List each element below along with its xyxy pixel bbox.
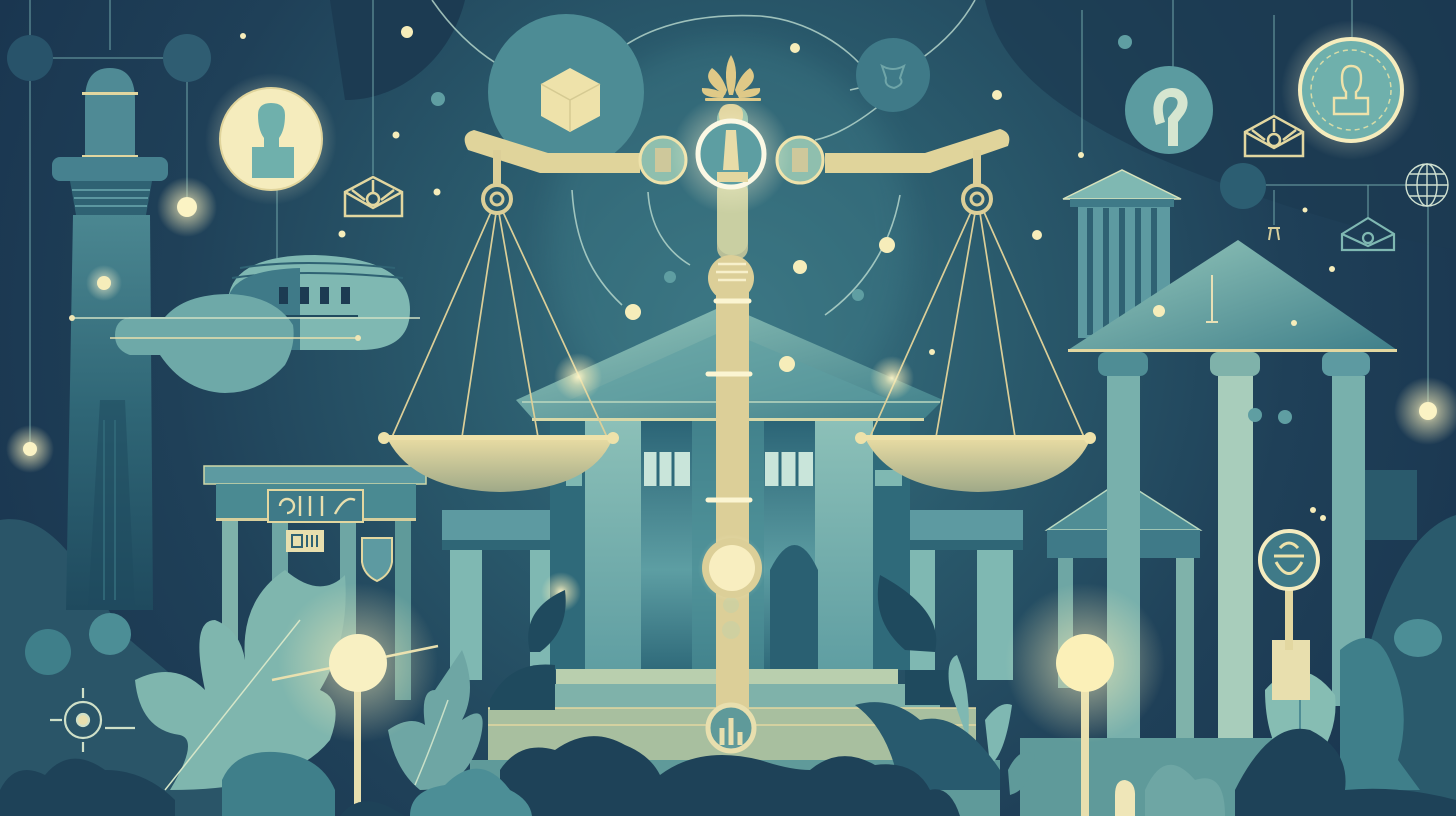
scale: left hanger and chains [392,150,607,437]
icon: envelope right top [1245,116,1303,156]
left network dots [6,34,217,473]
icon: keyhole circle [1125,66,1213,154]
centre temple [516,305,943,670]
top centre circle with hexagon icon [488,14,644,170]
floating light dots [240,26,1335,521]
right glow lamp [1394,377,1456,445]
scale: base ring [708,705,754,751]
scale: central post [708,105,754,725]
centre halo [550,40,910,440]
left node lines [30,0,373,450]
icon: person medallion left [205,73,337,205]
foliage: leaves left [25,570,483,790]
small hanging marker [1268,228,1280,240]
scale glow points [264,353,914,772]
orbit lines [432,0,975,315]
back wing left [442,510,572,680]
scale: central glowing medallion [671,94,791,214]
right temple far [1063,170,1181,338]
scale: right pan [855,432,1096,492]
left gate [204,466,426,700]
right temple [1020,240,1397,816]
icon: globe [1406,164,1448,206]
small figure [1115,780,1135,816]
right background building [1365,470,1417,540]
dark leaves centre [490,575,950,710]
lamp right [1005,583,1165,816]
scale: post orb [698,534,766,602]
gate sign [268,490,363,522]
icon: envelope right lower [1342,218,1394,250]
temple steps [470,669,1000,816]
foreground bushes [0,729,1456,816]
gate shield [362,538,392,581]
right foliage [855,619,1442,795]
right small temple [1047,480,1200,738]
scale: beam medallions [640,137,823,183]
icon: person medallion right [1281,20,1421,160]
icon: target left [50,688,135,752]
top right-centre circle icon [856,38,930,112]
left tower [52,68,168,610]
cloud [69,294,420,393]
foreground teal bushes [222,752,1225,816]
scale: beam [465,129,1009,173]
network node [1220,163,1266,209]
icon: key sign right [1260,531,1318,700]
capsule building [228,255,410,350]
lamp left [272,583,438,816]
back wing right [893,510,1023,680]
right line network [1082,0,1428,410]
gate small plaque [286,530,324,552]
scale: left pan [378,432,619,492]
floating teal dots [431,35,1292,424]
icon: envelope left [345,177,402,216]
scale: right hanger and chains [870,150,1084,437]
scale: top ornament [702,55,761,126]
